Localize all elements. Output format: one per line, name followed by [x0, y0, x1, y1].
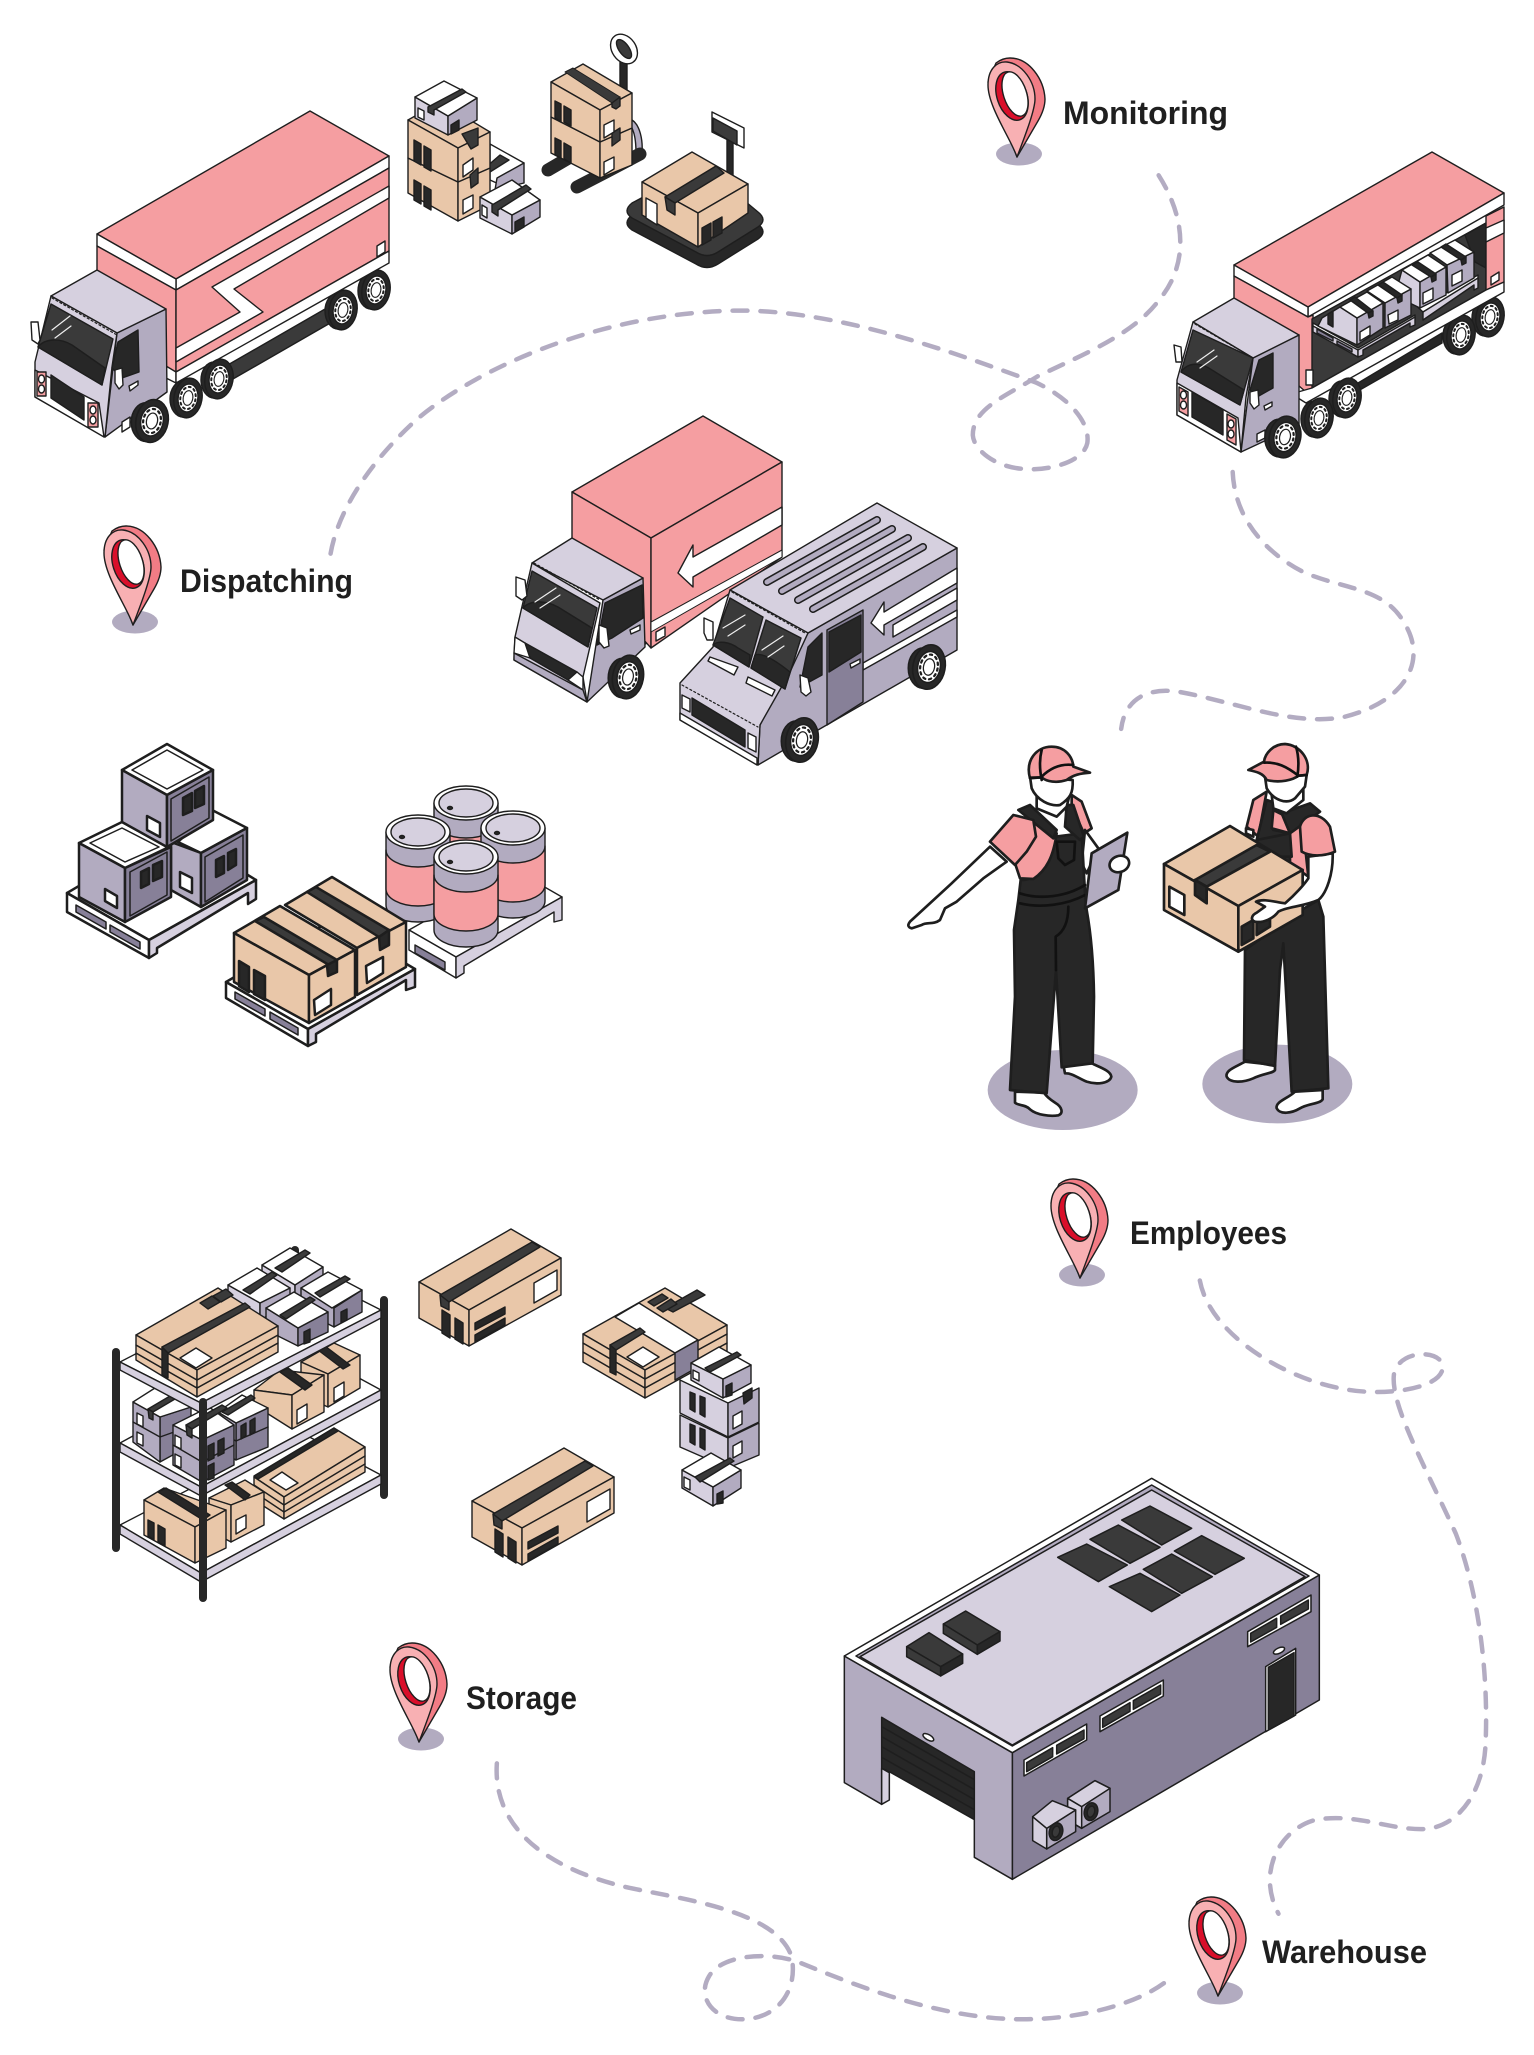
- roof ridges: [767, 520, 923, 609]
- pallet with cubes: [67, 744, 256, 958]
- flat parcels with wrap band: [583, 1288, 727, 1398]
- skylights: [1058, 1506, 1244, 1612]
- long carton: upper: [419, 1229, 561, 1346]
- middle shelf: [120, 1343, 381, 1496]
- label: Dispatching: Dispatching: [180, 563, 353, 599]
- pallet jack with boxes: [548, 29, 643, 187]
- location pin: Monitoring: [988, 58, 1045, 166]
- front lilac stack: [173, 1405, 234, 1482]
- location pin: Storage: [390, 1643, 447, 1750]
- label: Monitoring: Monitoring: [1063, 95, 1228, 131]
- windows: [1024, 1595, 1311, 1776]
- air conditioners: [1033, 1781, 1110, 1849]
- cargo on pallets: [1313, 240, 1478, 357]
- box stack with small cartons: [408, 81, 540, 234]
- delivery van: [680, 503, 957, 765]
- location pin: Warehouse: [1189, 1897, 1246, 2004]
- dashed route: employees to warehouse: [1200, 1280, 1486, 1914]
- location pin: Employees: [1051, 1179, 1108, 1286]
- dashed route: storage to warehouse: [497, 1763, 1171, 2019]
- dashed route: monitoring to employees: [1121, 472, 1414, 729]
- large pink truck: [31, 111, 393, 445]
- bottom shelf: [120, 1428, 381, 1582]
- platform scale with box: [627, 112, 763, 268]
- lilac carton column: [680, 1347, 759, 1506]
- worker pointing with clipboard: [908, 747, 1138, 1130]
- warehouse building: [844, 1478, 1319, 1879]
- side door: [1266, 1646, 1296, 1732]
- left lilac stack: [133, 1388, 191, 1462]
- label: Employees: Employees: [1130, 1215, 1287, 1251]
- back posts: [295, 1250, 384, 1495]
- dashed route: dispatching to monitoring: [331, 174, 1180, 554]
- worker carrying box: [1164, 744, 1352, 1123]
- open-side pink truck: [1174, 152, 1507, 460]
- pallet with drums: [386, 786, 562, 978]
- top shelf: [120, 1248, 381, 1413]
- long carton: lower: [472, 1448, 614, 1565]
- label: Warehouse: Warehouse: [1262, 1934, 1427, 1970]
- location pin: Dispatching: [104, 526, 161, 634]
- front pallet: [1313, 315, 1415, 357]
- roof units: [907, 1611, 1000, 1676]
- front posts: [116, 1352, 203, 1598]
- storage shelf with boxes: [116, 1248, 384, 1598]
- label: Storage: Storage: [466, 1680, 577, 1716]
- workers: [908, 744, 1352, 1130]
- cab: [514, 538, 645, 702]
- pallet with cartons: [226, 877, 415, 1046]
- rear lilac stack: [218, 1395, 268, 1460]
- rear pallet: [1410, 275, 1478, 320]
- cab: [31, 270, 167, 437]
- box truck with arrow: [514, 416, 782, 702]
- cab: [1174, 298, 1299, 452]
